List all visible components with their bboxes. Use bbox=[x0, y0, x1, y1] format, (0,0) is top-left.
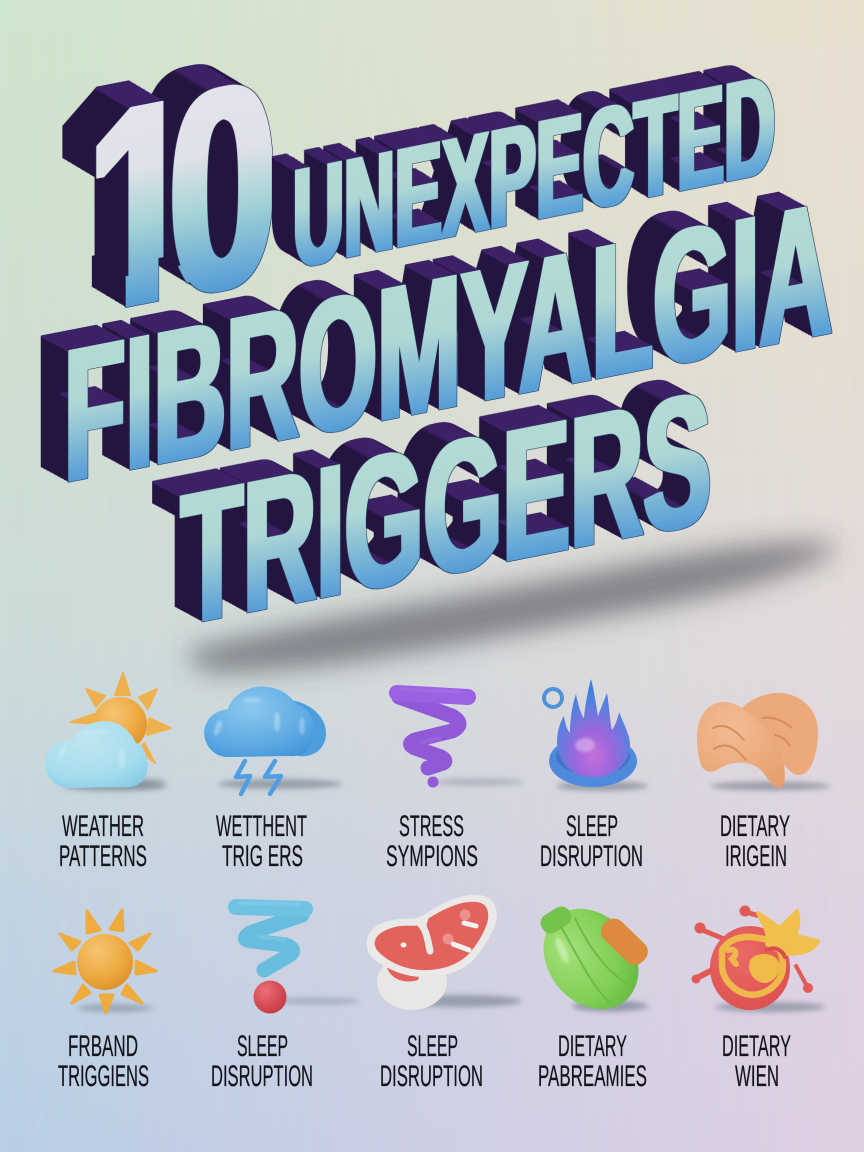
label: IRIGEIN bbox=[725, 840, 787, 873]
title: 10: 10 bbox=[87, 19, 277, 376]
label: FRBAND bbox=[68, 1030, 138, 1063]
label bbox=[58, 1030, 149, 1093]
label: WEATHER bbox=[62, 810, 144, 843]
label bbox=[540, 810, 643, 873]
item: dietary pabreamies bbox=[524, 890, 658, 1093]
icon: sun behind cloud bbox=[45, 673, 171, 791]
icon: orange folded shapes bbox=[697, 693, 830, 790]
item: sleep disruption 3 bbox=[367, 895, 522, 1093]
title drop shadow bbox=[189, 542, 838, 672]
icon: blue flame in bowl bbox=[544, 679, 648, 791]
label bbox=[59, 810, 147, 873]
label bbox=[538, 1030, 647, 1093]
icon: red and yellow splat bbox=[692, 906, 825, 1012]
label: DISRUPTION bbox=[380, 1060, 483, 1093]
icon: blue spiral with red ball bbox=[236, 903, 360, 1014]
label bbox=[722, 1030, 791, 1093]
label: SLEEP bbox=[237, 1030, 288, 1063]
item: wetthent triggers bbox=[204, 687, 342, 873]
icon: green jar bbox=[524, 890, 658, 1028]
label: WIEN bbox=[735, 1060, 779, 1093]
item: sleep disruption bbox=[540, 679, 648, 873]
label: DIETARY bbox=[722, 1030, 791, 1063]
item: sleep disruption 2 bbox=[211, 903, 360, 1093]
label bbox=[720, 810, 790, 873]
label: TRIGGIENS bbox=[58, 1060, 149, 1093]
label bbox=[386, 810, 478, 873]
label bbox=[216, 810, 307, 873]
label bbox=[380, 1030, 483, 1093]
label: SLEEP bbox=[407, 1030, 458, 1063]
icon: sun bbox=[54, 910, 156, 1013]
label: DISRUPTION bbox=[211, 1060, 313, 1093]
icon: purple spiral bbox=[397, 689, 524, 788]
label: PATTERNS bbox=[59, 840, 147, 873]
item: frband triggiens bbox=[54, 910, 156, 1093]
label: SLEEP bbox=[566, 810, 618, 843]
icon: storm cloud bbox=[204, 687, 342, 794]
label: SYMPIONS bbox=[386, 840, 478, 873]
label: STRESS bbox=[399, 810, 464, 843]
label bbox=[211, 1030, 313, 1093]
label: TRIG ERS bbox=[222, 840, 303, 873]
item: weather patterns bbox=[45, 673, 171, 873]
item: dietary wien bbox=[692, 906, 825, 1093]
label: DIETARY bbox=[720, 810, 790, 843]
label: DISRUPTION bbox=[540, 840, 643, 873]
label: PABREAMIES bbox=[538, 1060, 647, 1093]
item: stress symptoms bbox=[386, 689, 524, 873]
icon: meat slab bbox=[367, 895, 522, 1010]
label: DIETARY bbox=[558, 1030, 627, 1063]
item: dietary irigein bbox=[697, 693, 830, 873]
title bbox=[64, 19, 832, 666]
label: WETTHENT bbox=[216, 810, 307, 843]
